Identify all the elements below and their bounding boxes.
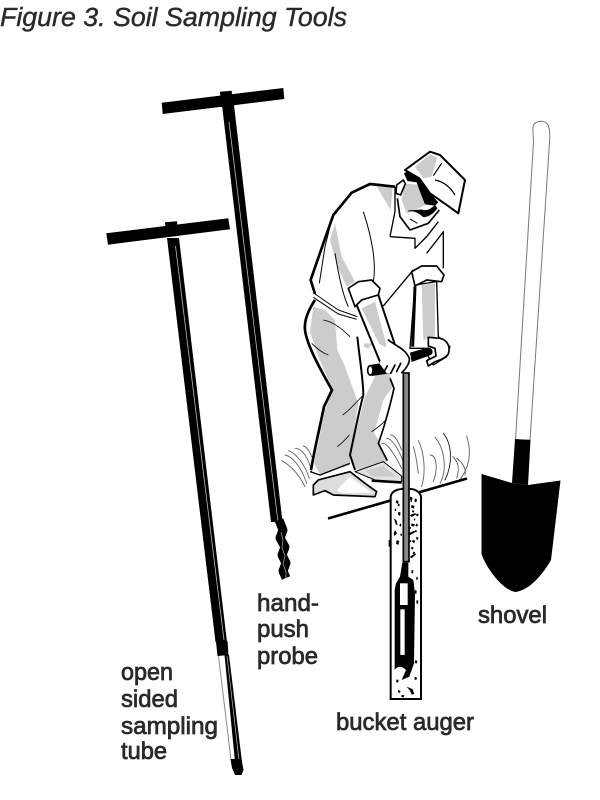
pants [305, 300, 394, 475]
label: open sided sampling tube: sampling [121, 713, 218, 740]
tool: shovel [482, 121, 560, 592]
ground line [328, 478, 467, 518]
auger bucket [395, 563, 415, 680]
label: shovel: shovel [478, 602, 547, 629]
head and cap [396, 152, 465, 230]
soil hole with bucket auger [389, 373, 421, 699]
title: Figure 3. Soil Sampling Tools [0, 4, 347, 32]
arms [348, 266, 450, 375]
label: hand-push probe: probe [257, 643, 318, 670]
label: open sided sampling tube: sided [121, 686, 178, 713]
auger handle and hands [368, 337, 449, 376]
grass [282, 433, 469, 487]
label: bucket auger: bucket auger [336, 709, 474, 736]
auger rod [403, 373, 409, 562]
label: hand-push probe [257, 590, 319, 670]
label: open sided sampling tube [121, 659, 218, 765]
sleeve cuffs [348, 280, 380, 307]
figure: man with auger [282, 152, 469, 497]
label: open sided sampling tube: open [121, 659, 173, 686]
tool: open sided sampling tube [106, 218, 244, 775]
torso and shirt [310, 184, 443, 319]
tool: hand-push probe [162, 88, 286, 578]
label: hand-push probe: push [257, 616, 309, 643]
soil speckles [389, 497, 419, 697]
label: open sided sampling tube: tube [121, 738, 167, 765]
label: hand-push probe: hand- [257, 590, 319, 617]
boots [313, 462, 402, 497]
